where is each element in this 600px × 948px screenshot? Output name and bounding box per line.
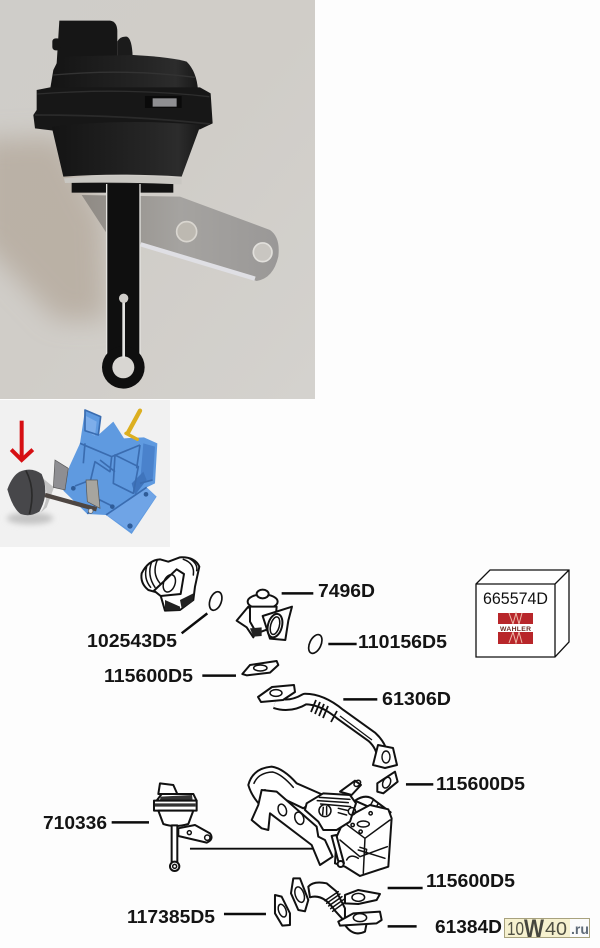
label: 115600D5 lower: 115600D5 (426, 870, 515, 891)
part: gasket 115600D5 upper right (377, 772, 398, 793)
label: 61306D: 61306D (382, 688, 451, 709)
product box: 665574D (476, 570, 569, 657)
bracket (82, 195, 279, 281)
label: 117385D5: 117385D5 (127, 906, 215, 927)
panel: actuator photo (0, 0, 315, 399)
label: 115600D5 right: 115600D5 (436, 773, 525, 794)
label: 110156D5: 110156D5 (358, 631, 447, 652)
watermark: 10W40.ru (504, 915, 590, 943)
icon: blue EGR module (63, 410, 157, 534)
leader lines (182, 593, 377, 699)
part: O-ring 110156D5 (306, 633, 325, 655)
label: 61384D: 61384D (435, 916, 502, 937)
logo: Wahler: WAHLER (500, 626, 531, 633)
icon: grey actuator on module (7, 460, 100, 524)
panel: upper exploded parts (141, 557, 377, 699)
part: pipe 61306D (258, 685, 397, 768)
part: throttle housing (141, 557, 199, 611)
label: 710336: 710336 (43, 812, 107, 833)
photo shadow (0, 137, 107, 320)
box part number: 665574D (483, 590, 548, 608)
actuator housing (33, 21, 213, 193)
label: 102543D5: 102543D5 (87, 630, 177, 651)
icon: yellow pin (126, 411, 140, 439)
icon: red arrow (13, 423, 31, 460)
label: 7496D: 7496D (318, 580, 375, 601)
label: 115600D5 upper: 115600D5 (104, 665, 193, 686)
panel: lower exploded parts (112, 767, 433, 933)
leader lines lower (112, 784, 433, 926)
watermark: 10W40.ru: 10 (507, 919, 524, 939)
watermark: 10W40.ru: .ru (571, 921, 589, 937)
panel: EGR module render (0, 400, 170, 547)
part: EGR cooler assembly (248, 767, 392, 876)
part: O-ring 102543D5 (207, 590, 224, 612)
part: actuator 710336 drawing (154, 783, 212, 871)
watermark: 10W40.ru: 40 (545, 919, 567, 939)
part: pipe 61384D (291, 878, 382, 933)
actuator rod (102, 184, 145, 389)
part: gasket 117385D5 (275, 895, 290, 926)
part: EGR valve 7496D (237, 590, 292, 640)
part: gasket 115600D5 (242, 661, 278, 675)
watermark: 10W40.ru: W (524, 915, 544, 943)
